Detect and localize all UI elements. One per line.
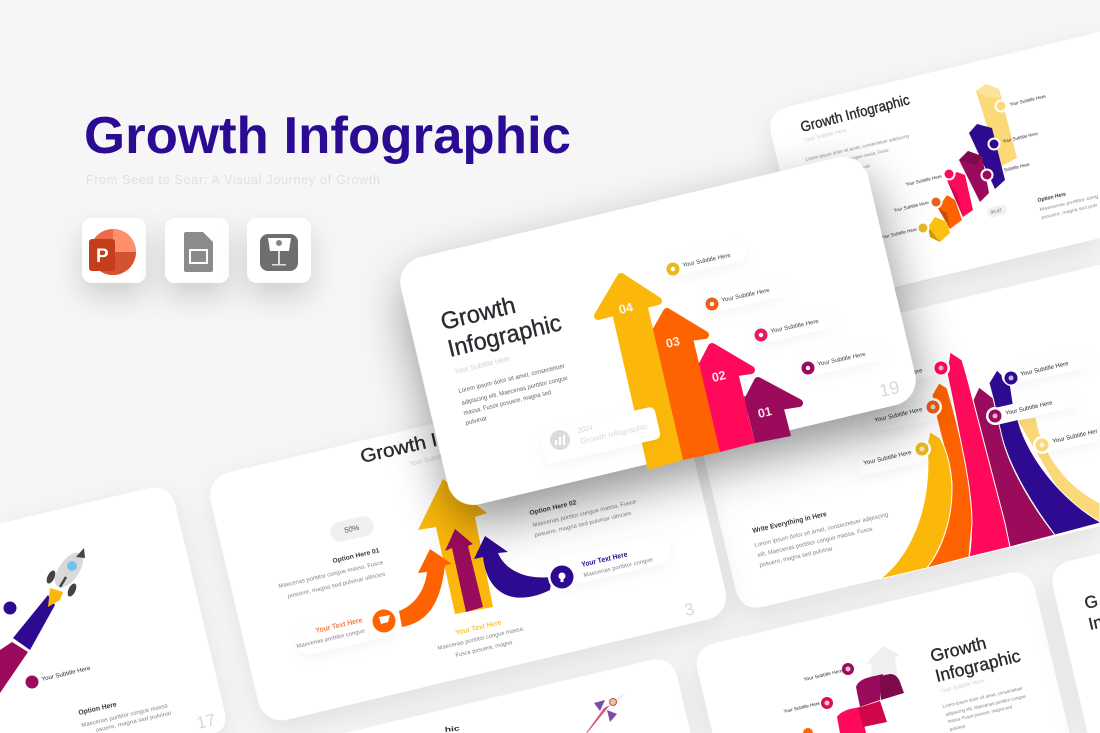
folded arrow chart (837, 674, 904, 733)
text block: option 01: Maecenas porttitor congue massa. Fusce (278, 560, 384, 590)
panel: arrows slide 3 (205, 367, 731, 725)
arrow: indigo curved (474, 536, 552, 598)
arrow numbers: 02 (711, 368, 727, 385)
panel: bottom right slide (697, 573, 1069, 733)
arrow 01 (742, 381, 799, 443)
arrow numbers: 04 (618, 300, 634, 317)
panel: top right slide (771, 32, 1100, 302)
callout: indigo text: Maecenas porttitor congue (583, 557, 654, 579)
tag: 2024 growth infographic: 2024 (577, 425, 594, 435)
callouts: curved arrows: Your Subtitle Here (874, 368, 924, 385)
callouts: subtitles: Your Subtitle Here (770, 319, 820, 335)
text block: write everything: posuere, magna sed pulvinar (759, 546, 834, 569)
body text (458, 363, 569, 427)
chart: curved fan arrows (880, 352, 1100, 579)
callout: orange text (296, 615, 366, 650)
callouts: isometric bars: Your Subtitle Here (993, 162, 1031, 175)
text block: write everything: Write Everything in Here (752, 511, 828, 535)
callouts: isometric bars: Your Subtitle Here (905, 174, 943, 187)
pill: 50%: 50% (343, 523, 360, 535)
subtitle: From Seed to Soar: A Visual Journey of Growth (86, 173, 380, 187)
option text (1037, 192, 1099, 220)
callouts: isometric bars (880, 94, 1047, 240)
callouts: subtitles: Your Subtitle Here (682, 253, 732, 269)
text block: option 01: posuere, magna sed pulvinar ultricies (287, 572, 386, 600)
callouts: curved arrows: Your Subtitle Here (874, 407, 924, 424)
option text: Maecenas porttitor congue massa (81, 703, 169, 729)
pill: left callout background (293, 607, 397, 657)
callout: yellow text: Maecenas porttitor congue massa. (437, 626, 526, 652)
subtitle: top right slide: Your Subtitle Here (804, 128, 847, 144)
page number 19: 19 (877, 377, 901, 401)
panel: main slide 19 (395, 152, 921, 510)
body text: adipiscing elit. Maecenas porttitor congue (945, 694, 1027, 718)
arrow: orange curved (399, 549, 452, 627)
heading: Infographic (933, 645, 1023, 686)
callout: yellow text (437, 618, 526, 659)
heading fragment (1083, 591, 1100, 634)
ghost arrow (866, 646, 900, 685)
callouts: isometric bars: Your Subtitle Here (893, 200, 930, 213)
heading: slide 3: Growth Infographic (358, 408, 534, 468)
body text: massa. Fusce posuere, magna sed (947, 704, 1013, 725)
icon: Keynote (247, 218, 311, 283)
arrow numbers: 01 (757, 404, 773, 421)
panel: far right slide (1053, 554, 1100, 733)
callouts: Your Subtitle Here (803, 668, 844, 683)
arrow numbers: 03 (665, 334, 681, 351)
value pill: 00.67 (990, 207, 1003, 215)
text block: option 01 (278, 547, 386, 600)
arrow 03 (650, 312, 720, 460)
tag: 2024 growth infographic: Growth Infographic (579, 422, 649, 446)
panel: curved arrows slide (687, 265, 1100, 607)
callouts: isometric bars: Your Subtitle Here (880, 227, 918, 240)
rocket trail (0, 588, 63, 693)
body text: Lorem ipsum dolor sit amet, consectetuer (458, 363, 565, 395)
text block: option 01: Option Here 01 (332, 547, 381, 565)
callout: indigo text (580, 550, 654, 579)
callouts: subtitles: Your Subtitle Here (817, 352, 867, 368)
page number 17: 17 (195, 710, 217, 733)
subtitle: Your Subtitle Here (940, 678, 986, 695)
chart: stepped arrows (598, 277, 799, 470)
value pill (986, 204, 1008, 218)
panel: rocket slide 17 (0, 488, 225, 733)
body text: adipiscing elit. Maecenas porttitor congue (461, 375, 569, 407)
icon: cart badge (370, 607, 398, 635)
option text: Option Here (78, 701, 118, 717)
callouts: subtitles (666, 242, 883, 378)
arrow 04 (598, 277, 683, 470)
callouts: curved arrows (855, 350, 1100, 477)
body text: top right slide (805, 133, 910, 182)
body text: massa. Fusce posuere, magna sed (463, 389, 552, 417)
title: Growth Infographic (84, 107, 571, 165)
callouts: curved arrows: Your Subtitle Here (863, 450, 913, 467)
body text: pulvinar (949, 723, 966, 733)
callouts: curved arrows: Your Subtitle Here (1005, 400, 1054, 417)
callouts: subtitles: Your Subtitle Here (721, 288, 771, 304)
icon: Google Slides (165, 218, 229, 283)
subtitle: Your Subtitle Here (453, 354, 511, 376)
callout badges: Your Subtitle Here (41, 666, 92, 683)
callout: orange text: Maecenas porttitor congue (296, 628, 366, 650)
body text (942, 686, 1027, 733)
callout: indigo text: Your Text Here (580, 550, 628, 569)
callouts: isometric bars: Your Subtitle Here (1002, 131, 1039, 144)
callouts: Your Subtitle Here (783, 701, 821, 715)
callouts: curved arrows: Your Subtitle Here (1020, 361, 1070, 378)
text block: option 02: posuere, magna sed pulvinar ultricies (534, 511, 632, 539)
callouts: curved arrows: Your Subtitle Her (1052, 429, 1098, 445)
pill: right callout background (545, 532, 673, 590)
text block: option 02: Option Here 02 (529, 499, 578, 517)
panel: bottom centre slide (345, 660, 691, 733)
text block: write everything (752, 511, 889, 569)
page number 3: 3 (683, 599, 696, 620)
icon: PowerPoint (82, 218, 146, 283)
callout badges (4, 602, 92, 688)
text block: write everything: Lorem ipsum dolor sit amet, consectetuer adipiscing (754, 512, 889, 549)
icon: PowerPoint: P (96, 246, 109, 267)
text block: option 02: Maecenas portitor congue massa. Fusce (532, 499, 637, 529)
body text: pulvinar (465, 415, 488, 427)
tag: 2024 growth infographic (539, 406, 661, 465)
heading: Growth (928, 633, 988, 666)
callouts (783, 663, 854, 733)
heading: Growth (438, 292, 518, 336)
heading fragment: G (1083, 591, 1100, 613)
body text: Lorem ipsum dolor sit amet, consectetuer (942, 686, 1024, 710)
option text: Option Here (1037, 192, 1067, 204)
callout: yellow text: Your Text Here (454, 618, 502, 637)
callouts: isometric bars: Your Subtitle Here (1009, 94, 1047, 107)
arrow: big yellow (418, 479, 493, 614)
arrow numbers (618, 300, 773, 421)
pill: 50% (328, 514, 376, 544)
option text: Maecenas porttitor cong (1039, 193, 1099, 212)
body text: top right slide: elit. Maecenas porttitor congue massa. Fusce (807, 147, 889, 171)
callout: yellow text: Fusce posuere, magna (455, 640, 514, 659)
heading: Infographic (445, 310, 564, 363)
arrow: maroon (445, 529, 483, 612)
body text: top right slide: Lorem ipsum dolor sit amet, consectetuer adipiscing (805, 133, 910, 162)
icon: small rocket (586, 693, 625, 733)
heading: top right slide: Growth Infographic (799, 92, 911, 136)
arrow 02 (696, 347, 755, 452)
chart: isometric growth bars (928, 84, 1017, 242)
callout: orange text: Your Text Here (314, 615, 363, 635)
icon: rocket (45, 548, 89, 598)
option text: posuere, magna sed pulv (1041, 202, 1099, 220)
body text: top right slide: posuere, magna sed pulvinar (809, 163, 871, 182)
subtitle: slide 3: Your Subtitle Here (409, 449, 462, 468)
text block: write everything: elit. Maecenas porttitor congue massa. Fusce (757, 526, 874, 559)
icon: bulb badge (548, 563, 576, 591)
